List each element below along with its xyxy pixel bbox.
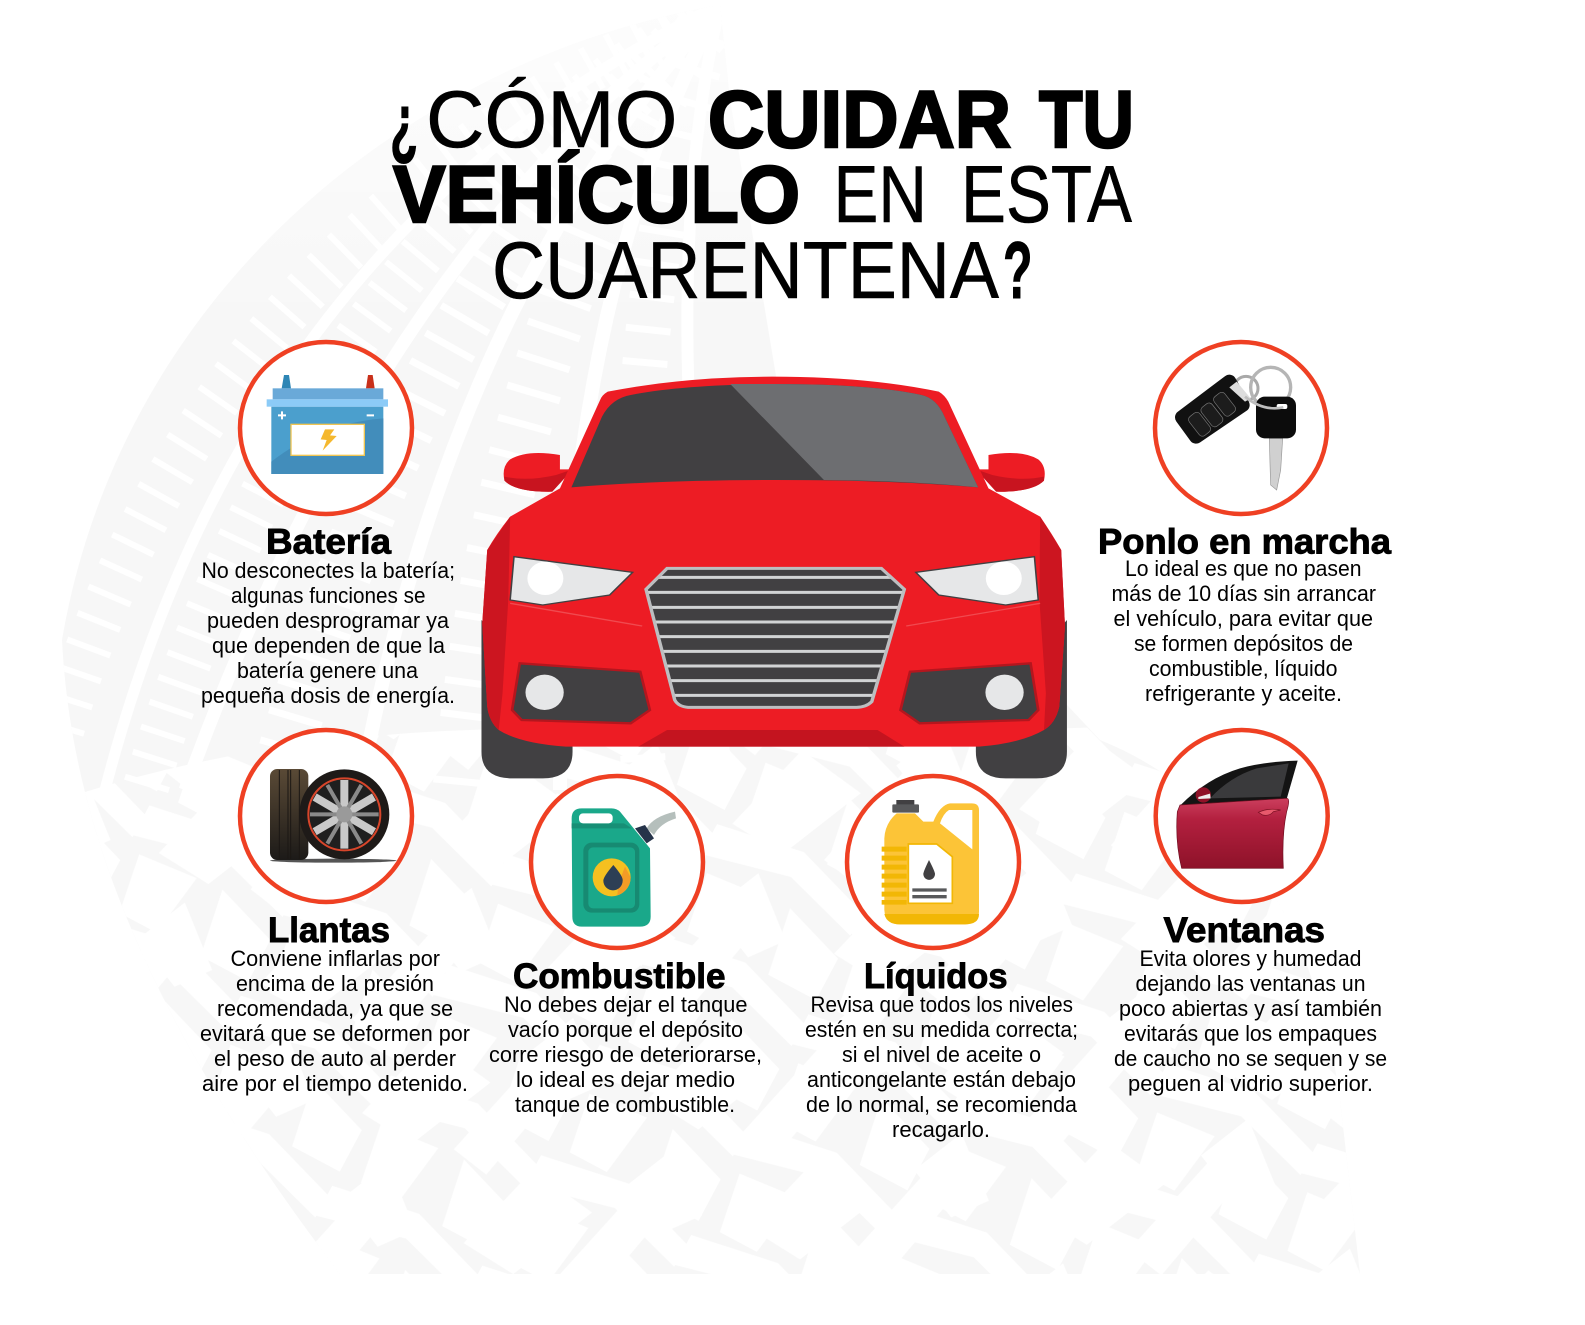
text: batería description: que dependen de que la bbox=[212, 633, 445, 658]
text: combustible description bbox=[489, 992, 762, 1117]
text: líquidos description: anticongelante están debajo bbox=[807, 1067, 1076, 1092]
text: combustible description: vacío porque el depósito bbox=[508, 1017, 743, 1042]
right body side bbox=[1039, 517, 1065, 730]
icon: tyres bbox=[240, 730, 412, 902]
text: ventanas description: evitarás que los empaques bbox=[1124, 1021, 1377, 1046]
text: llantas description: encima de la presión bbox=[236, 971, 434, 996]
title: TU bbox=[1039, 75, 1134, 165]
title: VEHÍCULO bbox=[393, 149, 800, 240]
icon: oil jug bbox=[847, 776, 1019, 948]
text: líquidos description: de lo normal, se recomienda bbox=[806, 1092, 1077, 1117]
text: llantas description: Conviene inflarlas por bbox=[230, 946, 440, 971]
panel: líquidos bbox=[805, 776, 1078, 1142]
text: ventanas description: poco abiertas y así también bbox=[1119, 996, 1382, 1021]
text: líquidos description: estén en su medida correcta; bbox=[805, 1017, 1078, 1042]
panel: batería bbox=[201, 342, 455, 708]
text: líquidos description bbox=[805, 992, 1078, 1142]
left body side bbox=[482, 517, 510, 730]
text: líquidos description: recagarlo. bbox=[892, 1117, 990, 1142]
text: líquidos description: si el nivel de aceite o bbox=[842, 1042, 1041, 1067]
left tyre bbox=[481, 620, 573, 778]
heading: Ventanas: Ventanas bbox=[1164, 911, 1325, 950]
windshield bbox=[571, 384, 978, 487]
text: batería description: No desconectes la batería; bbox=[202, 558, 455, 583]
right mirror bbox=[976, 453, 1045, 492]
heading: Combustible: Combustible bbox=[513, 957, 726, 996]
icon: car door bbox=[1156, 730, 1328, 902]
heading: Ponlo en marcha: Ponlo en marcha bbox=[1098, 522, 1392, 562]
text: combustible description: corre riesgo de deteriorarse, bbox=[489, 1042, 762, 1067]
title: EN bbox=[834, 150, 927, 240]
text: llantas description: aire por el tiempo detenido. bbox=[202, 1071, 468, 1096]
text: ponlo en marcha description: más de 10 días sin arrancar bbox=[1112, 581, 1376, 606]
car body bbox=[482, 377, 1065, 747]
title: ? bbox=[1003, 226, 1032, 316]
text: ponlo en marcha description: se formen depósitos de bbox=[1134, 631, 1353, 656]
text: llantas description: evitará que se deformen por bbox=[200, 1021, 470, 1046]
text: ponlo en marcha description: combustible, líquido bbox=[1149, 656, 1338, 681]
icon: car keys bbox=[1155, 342, 1327, 514]
icon: fuel can bbox=[531, 776, 703, 948]
text: ventanas description: Evita olores y humedad bbox=[1140, 946, 1362, 971]
panel: llantas bbox=[200, 730, 470, 1096]
right fog light bbox=[900, 663, 1038, 723]
title: CÓMO bbox=[426, 75, 678, 165]
hood creases bbox=[510, 603, 1040, 626]
text: batería description: algunas funciones se bbox=[231, 583, 426, 608]
text: ponlo en marcha description: Lo ideal es que no pasen bbox=[1125, 556, 1362, 581]
title: CUARENTENA bbox=[492, 226, 999, 316]
text: batería description: pequeña dosis de energía. bbox=[201, 683, 455, 708]
title: ESTA bbox=[961, 150, 1132, 240]
panel: combustible bbox=[489, 776, 762, 1117]
text: combustible description: lo ideal es dejar medio bbox=[516, 1067, 735, 1092]
car illustration bbox=[481, 377, 1067, 778]
title: CUIDAR bbox=[708, 75, 1011, 165]
icon: battery bbox=[240, 342, 412, 514]
text: ventanas description: peguen al vidrio superior. bbox=[1128, 1071, 1373, 1096]
heading: Batería: Batería bbox=[266, 522, 392, 562]
text: batería description bbox=[201, 558, 455, 708]
title: ¿ bbox=[390, 78, 418, 168]
panel: ponlo en marcha bbox=[1098, 342, 1392, 706]
text: líquidos description: Revisa que todos los niveles bbox=[810, 992, 1073, 1017]
lower bumper bbox=[638, 730, 904, 747]
text: llantas description: recomendada, ya que se bbox=[217, 996, 453, 1021]
heading: Llantas: Llantas bbox=[268, 911, 390, 950]
text: ponlo en marcha description bbox=[1112, 556, 1376, 706]
text: ventanas description: de caucho no se sequen y se bbox=[1114, 1046, 1387, 1071]
left headlight bbox=[510, 557, 633, 605]
right headlight bbox=[916, 557, 1038, 605]
text: ponlo en marcha description: el vehículo, para evitar que bbox=[1114, 606, 1373, 631]
text: llantas description: el peso de auto al perder bbox=[214, 1046, 456, 1071]
text: ventanas description bbox=[1114, 946, 1387, 1096]
text: ventanas description: dejando las ventanas un bbox=[1136, 971, 1366, 996]
text: batería description: pueden desprogramar ya bbox=[207, 608, 449, 633]
title bbox=[390, 75, 1134, 316]
heading: Líquidos: Líquidos bbox=[864, 957, 1008, 996]
grille bbox=[638, 568, 910, 707]
text: llantas description bbox=[200, 946, 470, 1096]
left mirror bbox=[504, 453, 573, 492]
left fog light bbox=[512, 663, 650, 723]
text: batería description: batería genere una bbox=[237, 658, 418, 683]
text: ponlo en marcha description: refrigerante y aceite. bbox=[1145, 681, 1342, 706]
text: combustible description: No debes dejar el tanque bbox=[504, 992, 748, 1017]
panel: ventanas bbox=[1114, 730, 1387, 1096]
text: combustible description: tanque de combustible. bbox=[515, 1092, 735, 1117]
right tyre bbox=[976, 620, 1067, 778]
